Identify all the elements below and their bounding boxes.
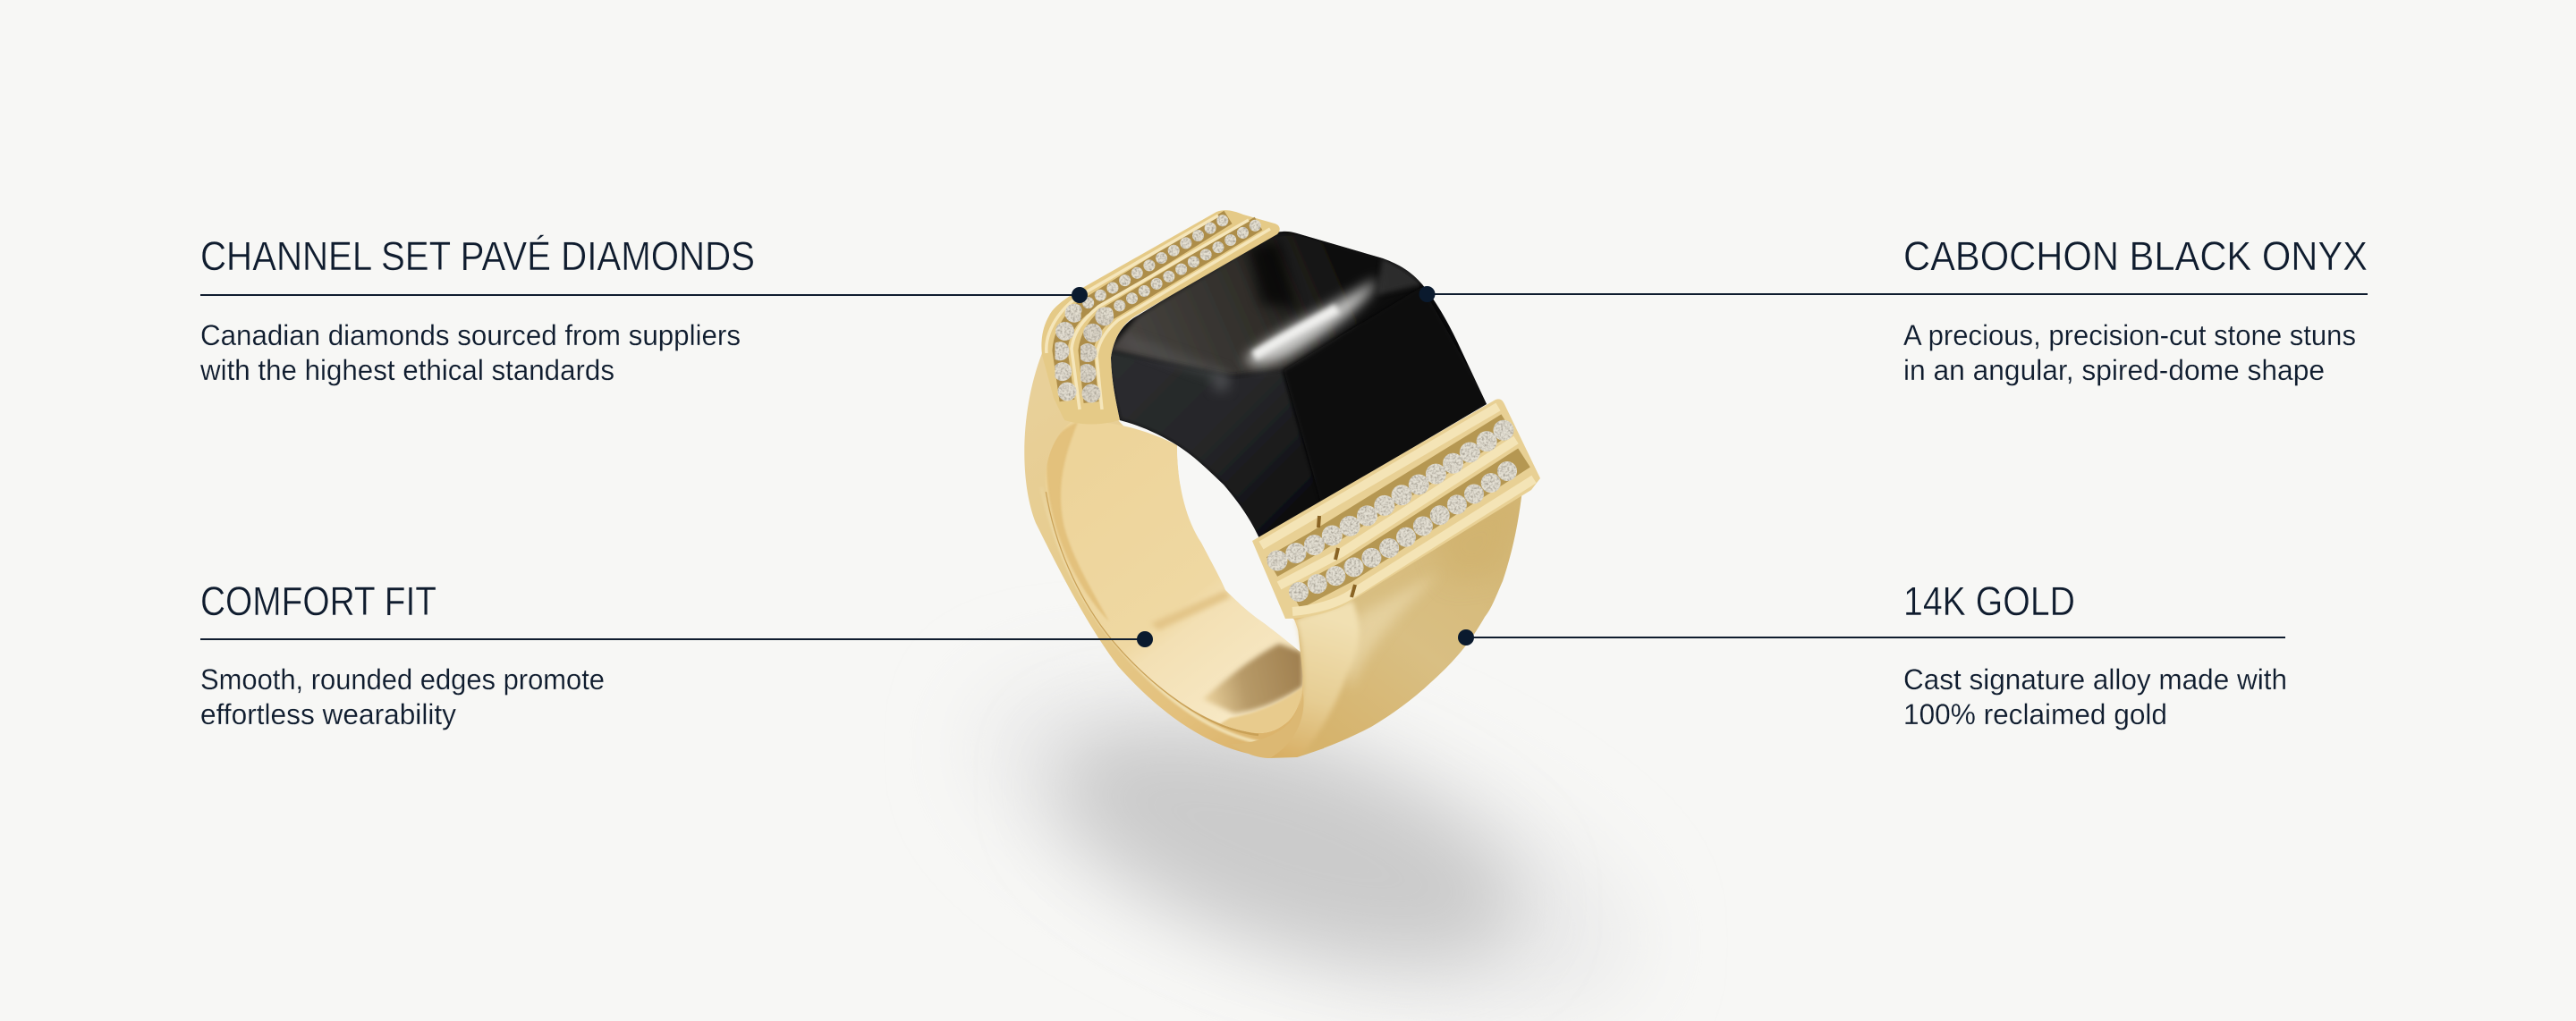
leader line bbox=[1428, 293, 2368, 295]
description: with the highest ethical standards bbox=[199, 354, 614, 386]
diamonds row two bbox=[1299, 462, 1520, 592]
diamonds row one bbox=[1277, 427, 1508, 561]
lower lip bbox=[1219, 688, 1302, 733]
heading: CHANNEL SET PAVÉ DIAMONDS bbox=[200, 233, 755, 279]
ring shadow bbox=[973, 674, 1639, 1016]
onyx top facet bbox=[1109, 233, 1422, 376]
onyx front facet bbox=[1284, 286, 1489, 506]
outer band bbox=[1024, 353, 1324, 757]
plate rails bbox=[1261, 407, 1534, 612]
inner band surface bbox=[1046, 421, 1302, 733]
plate body bbox=[1252, 399, 1540, 619]
description: Canadian diamonds sourced from suppliers bbox=[200, 319, 741, 351]
description: 100% reclaimed gold bbox=[1903, 698, 2167, 730]
onyx edge sheen bbox=[1123, 340, 1225, 375]
description: effortless wearability bbox=[200, 698, 456, 730]
rail glints bbox=[1318, 516, 1355, 597]
onyx stone bbox=[1111, 231, 1487, 537]
crease shading bbox=[1151, 590, 1231, 630]
right band sheen bbox=[1292, 531, 1516, 757]
diamonds upper rows bbox=[1076, 217, 1258, 313]
callout: comfort fit bbox=[200, 578, 1153, 730]
plate body bbox=[1041, 210, 1280, 424]
description: in an angular, spired-dome shape bbox=[1903, 354, 2325, 386]
onyx soft reflection bbox=[1248, 241, 1297, 308]
front diamond plate bbox=[1252, 399, 1540, 619]
heading: 14K GOLD bbox=[1903, 578, 2075, 624]
band highlight and lip bbox=[1041, 487, 1275, 745]
channel tracks bbox=[1272, 424, 1524, 599]
callout: channel set pavé diamonds bbox=[199, 233, 1088, 386]
callout: 14k gold bbox=[1458, 578, 2287, 730]
onyx glossy highlight bbox=[1245, 279, 1377, 365]
side shade bbox=[1046, 422, 1109, 621]
inner band reflections bbox=[1046, 422, 1304, 738]
dark reflection bbox=[1203, 644, 1304, 713]
diamonds row two lower bbox=[1087, 313, 1107, 393]
ring opening bbox=[1177, 445, 1301, 653]
leader line bbox=[200, 294, 1080, 296]
shank fold bbox=[1292, 601, 1360, 757]
heading: COMFORT FIT bbox=[200, 578, 436, 624]
anchor dot bbox=[1419, 286, 1435, 302]
right band bbox=[1270, 490, 1522, 758]
plate rails bbox=[1046, 215, 1270, 409]
leader line bbox=[1466, 637, 2285, 638]
leader line bbox=[200, 638, 1145, 640]
diamonds row one lower bbox=[1060, 310, 1076, 392]
callout: cabochon black onyx bbox=[1419, 233, 2368, 386]
diamond channels bbox=[1060, 217, 1258, 402]
anchor dot bbox=[1458, 629, 1474, 646]
ring illustration bbox=[1024, 210, 1540, 760]
description: A precious, precision-cut stone stuns bbox=[1903, 319, 2356, 351]
description: Cast signature alloy made with bbox=[1903, 663, 2287, 696]
anchor dot bbox=[1072, 287, 1088, 303]
onyx base bbox=[1111, 231, 1487, 537]
rim bottom bbox=[1230, 688, 1304, 758]
anchor dot bbox=[1137, 631, 1153, 647]
description: Smooth, rounded edges promote bbox=[200, 663, 605, 696]
heading: CABOCHON BLACK ONYX bbox=[1903, 233, 2368, 279]
top diamond plate bbox=[1041, 210, 1280, 424]
onyx left facet bbox=[1109, 350, 1324, 542]
